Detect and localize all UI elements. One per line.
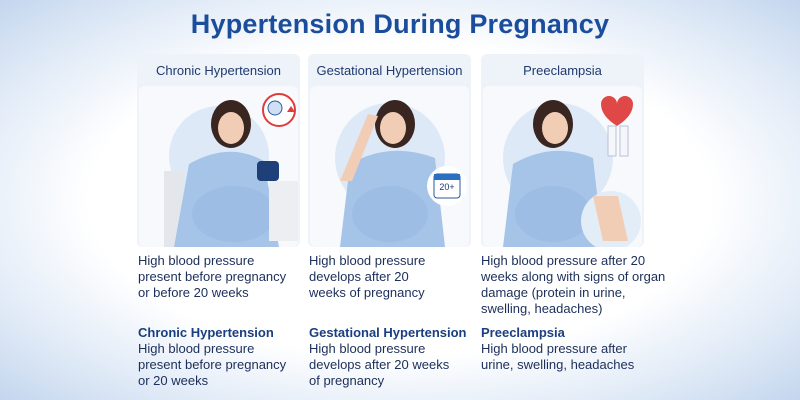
text: chronic description: or before 20 weeks bbox=[138, 285, 249, 300]
text: chronic summary: present before pregnancy bbox=[138, 357, 286, 372]
heading: preeclampsia: Preeclampsia bbox=[523, 63, 602, 78]
text: gestational summary: develops after 20 weeks bbox=[309, 357, 449, 372]
text: preeclampsia description: High blood pressure after 20 bbox=[481, 253, 645, 268]
panel: preeclampsia bbox=[481, 54, 644, 247]
text: preeclampsia summary bbox=[481, 325, 634, 372]
text: chronic summary: High blood pressure bbox=[138, 341, 254, 356]
heading: gestational: Gestational Hypertension bbox=[316, 63, 462, 78]
title: Hypertension During Pregnancy bbox=[191, 9, 609, 39]
illustration: woman with cuff bbox=[139, 86, 298, 247]
illustration: woman with heart and swollen feet bbox=[483, 86, 642, 247]
text: preeclampsia summary: High blood pressure after bbox=[481, 341, 627, 356]
text: chronic summary bbox=[138, 325, 286, 388]
text: chronic description bbox=[138, 253, 286, 300]
text: chronic summary: or 20 weeks bbox=[138, 373, 208, 388]
text: preeclampsia summary: urine, swelling, headaches bbox=[481, 357, 634, 372]
text: gestational summary: Gestational Hypertension bbox=[309, 325, 466, 340]
panel: chronic bbox=[137, 54, 300, 247]
text: gestational description: develops after 20 bbox=[309, 269, 409, 284]
text: gestational description: High blood pressure bbox=[309, 253, 425, 268]
illustration: woman with headache bbox=[310, 86, 469, 247]
text: chronic summary: Chronic Hypertension bbox=[138, 325, 274, 340]
text: preeclampsia description: damage (protein in urine, bbox=[481, 285, 626, 300]
text: gestational description: weeks of pregnancy bbox=[309, 285, 425, 300]
heading: chronic: Chronic Hypertension bbox=[156, 63, 281, 78]
text: preeclampsia description: swelling, headaches) bbox=[481, 301, 602, 316]
text: gestational summary: of pregnancy bbox=[309, 373, 384, 388]
text: gestational description bbox=[309, 253, 425, 300]
text: gestational summary bbox=[309, 325, 466, 388]
text: chronic description: High blood pressure bbox=[138, 253, 254, 268]
text: preeclampsia description: weeks along with signs of organ bbox=[481, 269, 665, 284]
panel: gestational bbox=[308, 54, 471, 247]
text: gestational summary: High blood pressure bbox=[309, 341, 425, 356]
text: preeclampsia summary: Preeclampsia bbox=[481, 325, 565, 340]
text: preeclampsia description bbox=[481, 253, 665, 316]
illustration: woman with headache: 20+ bbox=[439, 182, 455, 192]
text: chronic description: present before pregnancy bbox=[138, 269, 286, 284]
